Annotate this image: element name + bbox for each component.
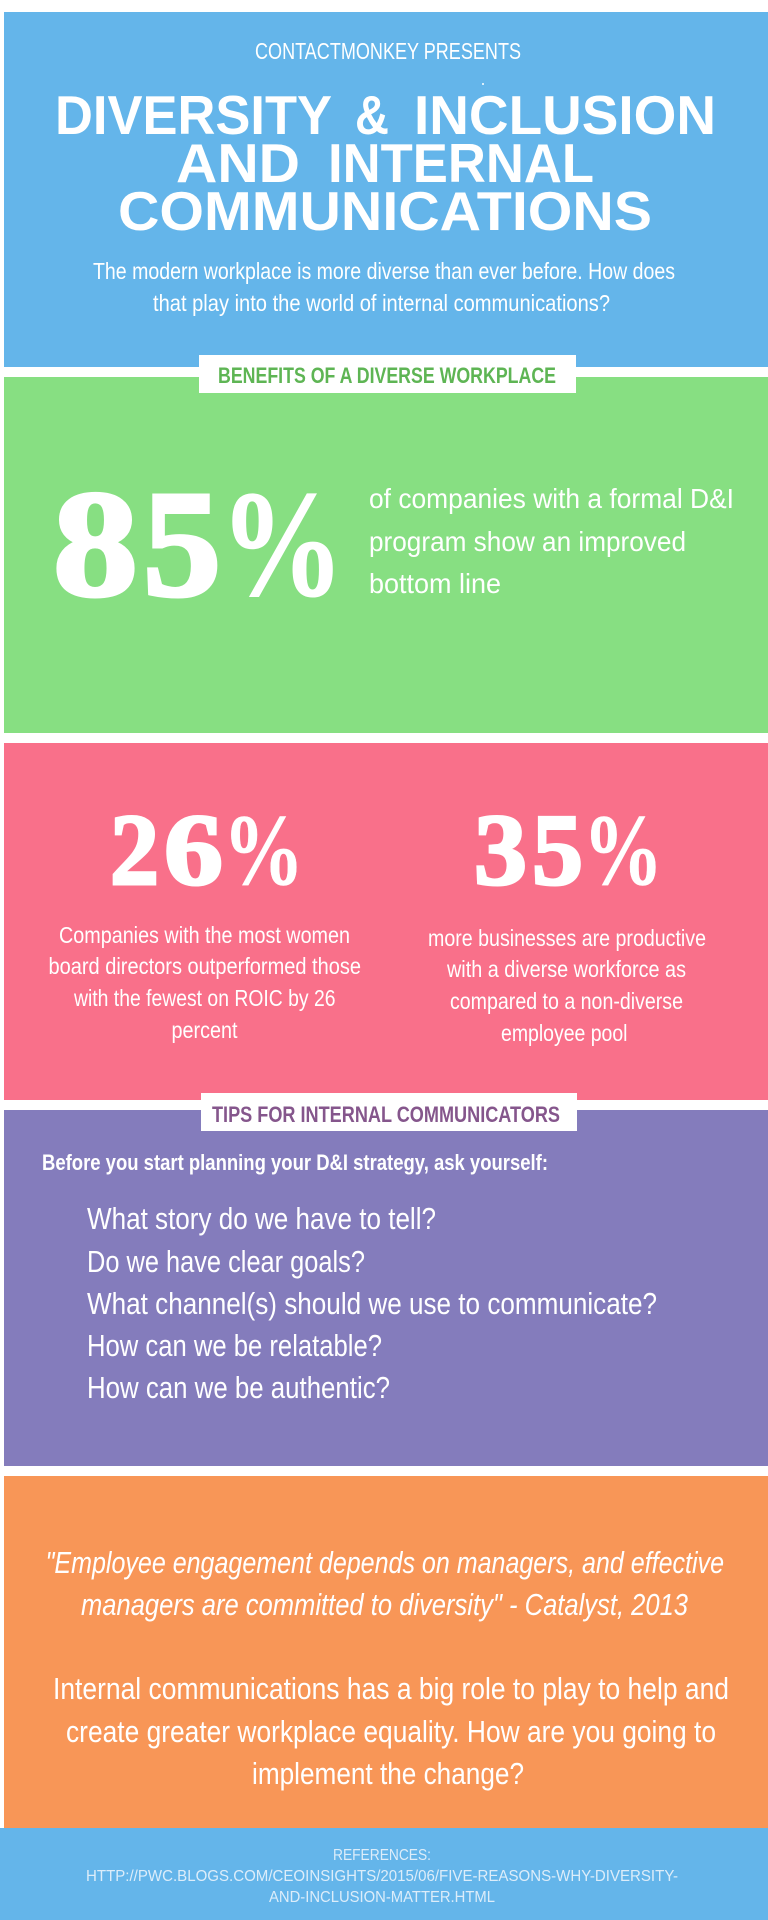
- big number 26%: [110, 794, 304, 907]
- big number 85%: 8: [53, 460, 138, 628]
- quote: [46, 1545, 724, 1622]
- heading: benefits: [199, 355, 576, 393]
- stat description: [369, 483, 734, 599]
- description for 26%: percent: [172, 1017, 238, 1043]
- stat description: bottom line: [369, 568, 501, 599]
- stat description: program show an improved: [369, 526, 686, 557]
- description for 35%: with a diverse workforce as: [446, 956, 686, 982]
- tips list: How can we be authentic?: [87, 1370, 390, 1405]
- title: [55, 83, 716, 242]
- closing paragraph: [53, 1671, 729, 1791]
- heading: tips: [201, 1093, 577, 1131]
- stat description: of companies with a formal D&I: [369, 483, 734, 514]
- tips list: How can we be relatable?: [87, 1328, 382, 1363]
- title: &: [355, 84, 389, 146]
- big number 35%: 3: [474, 794, 527, 907]
- big number 85%: [53, 460, 344, 628]
- tips intro: Before you start planning your D&I strategy, ask yourself:: [42, 1150, 548, 1175]
- big number 35%: [474, 794, 663, 907]
- panel: closing quote: [4, 1476, 768, 1828]
- title: AND: [176, 132, 300, 194]
- references text: [86, 1847, 678, 1906]
- big number 35%: 5: [532, 794, 583, 907]
- heading: benefits: BENEFITS OF A DIVERSE WORKPLACE: [218, 363, 556, 388]
- intro text: [93, 258, 675, 316]
- panel: 26 and 35 percent stats: [4, 743, 768, 1100]
- tips list: What channel(s) should we use to communicate?: [87, 1286, 657, 1321]
- big number 85%: 5: [143, 460, 221, 628]
- description for 35%: compared to a non-diverse: [450, 988, 683, 1014]
- panel: references footer: [0, 1828, 768, 1920]
- presenter line: CONTACTMONKEY PRESENTS: [255, 38, 521, 64]
- references text: REFERENCES:: [333, 1847, 431, 1864]
- description for 26%: with the fewest on ROIC by 26: [73, 985, 335, 1011]
- title: INTERNAL: [328, 132, 594, 194]
- big number 26%: 2: [110, 794, 159, 907]
- title: COMMUNICATIONS: [118, 180, 652, 242]
- description for 35%: employee pool: [501, 1020, 628, 1046]
- references text: AND-INCLUSION-MATTER.HTML: [269, 1889, 495, 1906]
- description for 35%: [428, 925, 706, 1046]
- tips list: What story do we have to tell?: [87, 1201, 436, 1236]
- description for 26%: board directors outperformed those: [48, 953, 361, 979]
- big number 26%: 6: [164, 794, 223, 907]
- references text: HTTP://PWC.BLOGS.COM/CEOINSIGHTS/2015/06/FIVE-REASONS-WHY-DIVERSITY-: [86, 1868, 678, 1885]
- big number 85%: %: [220, 460, 344, 628]
- description for 26%: [48, 922, 361, 1043]
- title: INCLUSION: [414, 84, 716, 146]
- description for 35%: more businesses are productive: [428, 925, 706, 951]
- intro text: that play into the world of internal communications?: [153, 290, 610, 316]
- closing paragraph: implement the change?: [252, 1756, 524, 1791]
- tips list: Do we have clear goals?: [87, 1244, 365, 1279]
- title: DIVERSITY: [55, 84, 332, 146]
- panel: header: [4, 12, 768, 367]
- big number 26%: %: [223, 794, 304, 907]
- tips list: [87, 1201, 657, 1405]
- description for 26%: Companies with the most women: [59, 922, 350, 948]
- panel: 85 percent stat: [4, 377, 768, 733]
- panel: tips: [4, 1110, 768, 1466]
- heading: tips: TIPS FOR INTERNAL COMMUNICATORS: [212, 1102, 560, 1127]
- big number 35%: %: [583, 794, 663, 907]
